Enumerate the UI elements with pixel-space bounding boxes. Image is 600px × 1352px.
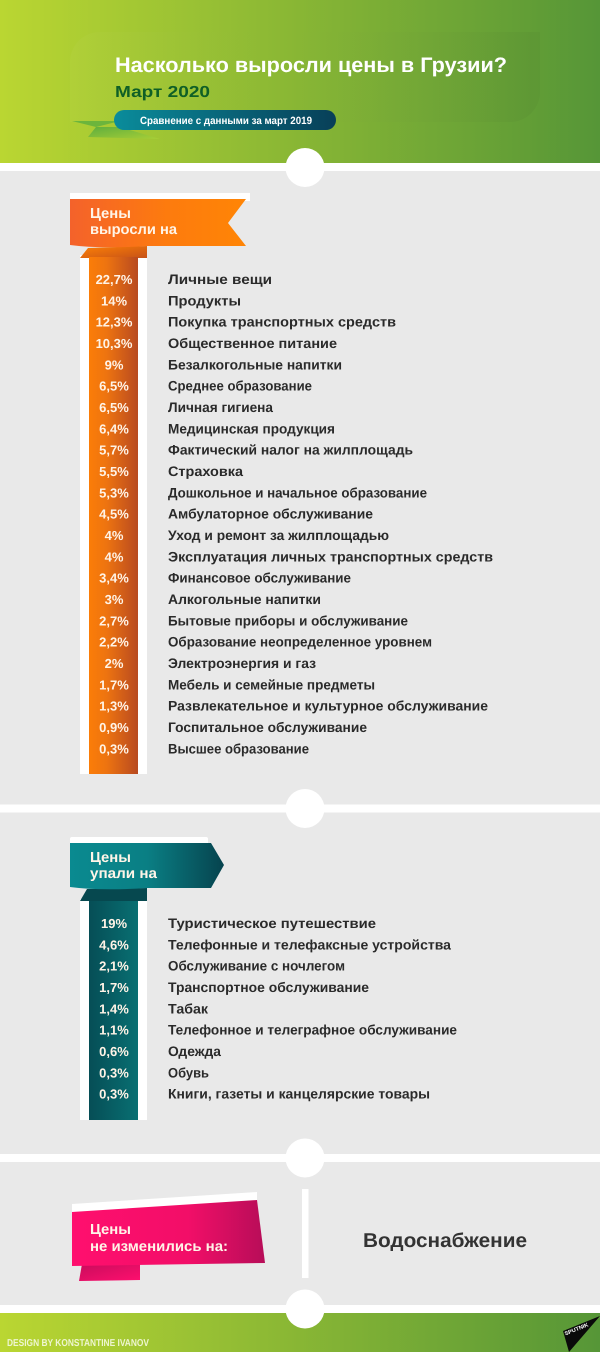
- row: Электроэнергия и газ: [168, 656, 316, 671]
- panel: prices fell: [70, 837, 457, 1120]
- row: 4%: [105, 528, 124, 543]
- row: Образование неопределенное уровнем: [168, 635, 432, 650]
- row: [99, 1001, 208, 1016]
- row: 14%: [101, 293, 127, 308]
- row: [105, 656, 316, 671]
- row: Покупка транспортных средств: [168, 315, 396, 330]
- row: Личная гигиена: [168, 400, 273, 415]
- subtitle pill: Сравнение с данными за март 2019: [140, 115, 312, 127]
- row: [99, 379, 312, 394]
- row: 6,5%: [99, 400, 129, 415]
- row: Страховка: [168, 464, 243, 479]
- title: Насколько выросли цены в Грузии?: [115, 54, 507, 77]
- row: 1,3%: [99, 699, 129, 714]
- row: 2,1%: [99, 959, 129, 974]
- row: [96, 336, 337, 351]
- divider: fourth: [0, 1290, 600, 1328]
- row: 5,5%: [99, 464, 129, 479]
- heading: unchanged banner: [72, 1192, 265, 1281]
- row: 3,4%: [99, 571, 129, 586]
- header band: [0, 0, 600, 163]
- row: 0,6%: [99, 1044, 129, 1059]
- row: 5,7%: [99, 443, 129, 458]
- row: 0,3%: [99, 1065, 129, 1080]
- row: Финансовое обслуживание: [168, 571, 351, 586]
- row: Эксплуатация личных транспортных средств: [168, 549, 493, 564]
- row: 2,7%: [99, 613, 129, 628]
- row: Госпитальное обслуживание: [168, 720, 367, 735]
- row: Транспортное обслуживание: [168, 980, 369, 995]
- row: Бытовые приборы и обслуживание: [168, 613, 408, 628]
- row: [101, 293, 241, 308]
- row: 9%: [105, 357, 124, 372]
- subtitle pill: [114, 110, 336, 130]
- divider: second: [0, 789, 600, 828]
- row: Высшее образование: [168, 741, 309, 756]
- row: Среднее образование: [168, 379, 312, 394]
- bar: teal column: [89, 901, 138, 1120]
- row: Книги, газеты и канцелярские товары: [168, 1087, 430, 1102]
- row: 6,4%: [99, 421, 129, 436]
- list: fell items: [99, 916, 457, 1102]
- row: Обслуживание с ночлегом: [168, 959, 345, 974]
- row: 22,7%: [96, 272, 133, 287]
- row: 1,7%: [99, 980, 129, 995]
- date: Март 2020: [115, 84, 210, 101]
- row: 4%: [105, 549, 124, 564]
- row: [99, 464, 243, 479]
- row: Амбулаторное обслуживание: [168, 507, 373, 522]
- row: 2%: [105, 656, 124, 671]
- row: Фактический налог на жилплощадь: [168, 443, 413, 458]
- heading: prices fell banner: [70, 837, 224, 1120]
- header panel: [70, 32, 540, 122]
- heading: prices fell banner: упали на: [90, 866, 158, 882]
- divider: third: [0, 1138, 600, 1178]
- heading: prices fell banner: Цены: [90, 850, 131, 866]
- row: [99, 1044, 221, 1059]
- row: Одежда: [168, 1044, 221, 1059]
- credit: DESIGN BY KONSTANTINE IVANOV: [7, 1338, 149, 1349]
- row: Туристическое путешествие: [168, 916, 376, 931]
- row: Общественное питание: [168, 336, 337, 351]
- row: 1,4%: [99, 1001, 129, 1016]
- heading: prices rose banner: [70, 193, 250, 774]
- row: Личные вещи: [168, 272, 272, 287]
- row: Телефонное и телеграфное обслуживание: [168, 1023, 457, 1038]
- row: 4,6%: [99, 937, 129, 952]
- row: 12,3%: [96, 315, 133, 330]
- row: 0,9%: [99, 720, 129, 735]
- row: 5,3%: [99, 485, 129, 500]
- row: 1,1%: [99, 1023, 129, 1038]
- row: Алкогольные напитки: [168, 592, 321, 607]
- row: Табак: [168, 1001, 208, 1016]
- bar: orange column: [89, 257, 138, 774]
- row: 10,3%: [96, 336, 133, 351]
- row: [99, 1065, 209, 1080]
- heading: prices rose banner: выросли на: [90, 222, 178, 238]
- unchanged item: Водоснабжение: [363, 1230, 527, 1252]
- row: Мебель и семейные предметы: [168, 677, 375, 692]
- ribbon tail: [72, 121, 160, 139]
- row: Обувь: [168, 1065, 209, 1080]
- panel: prices rose: [70, 193, 493, 774]
- row: Развлекательное и культурное обслуживание: [168, 699, 488, 714]
- icon: sputnik logo: SPUTNIK: [564, 1322, 589, 1337]
- row: [96, 272, 272, 287]
- row: 0,3%: [99, 741, 129, 756]
- row: Дошкольное и начальное образование: [168, 485, 427, 500]
- row: [105, 592, 321, 607]
- row: Уход и ремонт за жилплощадью: [168, 528, 389, 543]
- row: Безалкогольные напитки: [168, 357, 342, 372]
- row: 0,3%: [99, 1087, 129, 1102]
- heading: unchanged banner: Цены: [90, 1222, 131, 1238]
- row: [99, 741, 309, 756]
- row: Медицинская продукция: [168, 421, 335, 436]
- heading: prices rose banner: Цены: [90, 206, 131, 222]
- row: Телефонные и телефаксные устройства: [168, 937, 451, 952]
- row: 2,2%: [99, 635, 129, 650]
- row: [99, 400, 273, 415]
- row: 4,5%: [99, 507, 129, 522]
- heading: unchanged banner: не изменились на:: [90, 1239, 228, 1255]
- row: 3%: [105, 592, 124, 607]
- list: rose items: [96, 272, 493, 756]
- divider: top: [0, 148, 600, 187]
- panel: unchanged: [72, 1189, 527, 1281]
- row: 6,5%: [99, 379, 129, 394]
- footer band: [0, 1313, 600, 1352]
- icon: sputnik logo: [563, 1316, 600, 1352]
- row: 1,7%: [99, 677, 129, 692]
- row: 19%: [101, 916, 127, 931]
- row: Продукты: [168, 293, 241, 308]
- vertical divider: [302, 1189, 308, 1278]
